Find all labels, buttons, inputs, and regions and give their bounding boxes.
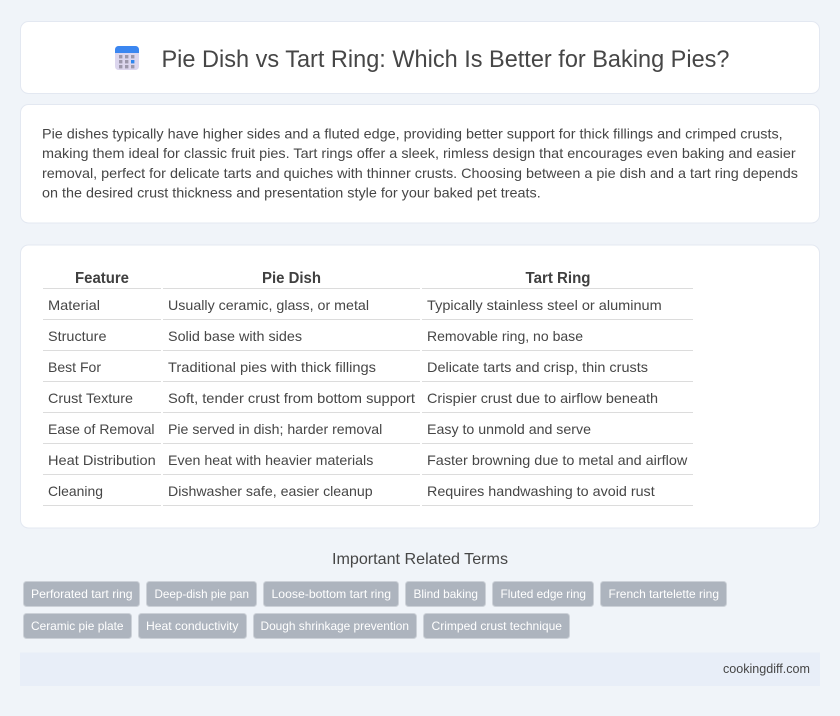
tag: deep-dish pie pan: Deep-dish pie pan xyxy=(154,587,249,601)
tag: heat conductivity xyxy=(138,614,246,638)
text block: introduction paragraph: on the desired crust thickness and presentation style for your baked pet treats. xyxy=(42,184,541,200)
tag: fluted edge ring: Fluted edge ring xyxy=(500,587,586,601)
table row: best for: Traditional pies with thick fillings xyxy=(168,359,376,375)
table row: cleaning: Requires handwashing to avoid rust xyxy=(427,483,655,499)
table header row xyxy=(75,270,590,287)
table row: material: Usually ceramic, glass, or metal xyxy=(168,297,369,313)
title: Pie Dish vs Tart Ring: Which Is Better for Baking Pies? xyxy=(162,46,730,73)
tag: dough shrinkage prevention xyxy=(254,614,416,638)
table row: material: Typically stainless steel or aluminum xyxy=(427,297,662,313)
icon: calendar xyxy=(115,46,139,70)
table row: best for xyxy=(48,359,648,375)
table row: heat distribution: Even heat with heavier materials xyxy=(168,452,373,468)
table row: best for: Delicate tarts and crisp, thin crusts xyxy=(427,359,648,375)
table row: structure: Removable ring, no base xyxy=(427,328,583,344)
table header row: Tart Ring xyxy=(526,270,590,287)
tag group: related terms xyxy=(24,582,726,638)
table row: crust texture xyxy=(48,390,658,406)
tag: ceramic pie plate xyxy=(24,614,132,638)
table row: material: Material xyxy=(48,297,100,313)
table row: best for: Best For xyxy=(48,359,101,375)
tag: dough shrinkage prevention: Dough shrinkage prevention xyxy=(260,619,409,633)
tag: perforated tart ring xyxy=(24,582,140,606)
table row: crust texture: Crispier crust due to airflow beneath xyxy=(427,390,658,406)
table row: ease of removal: Easy to unmold and serve xyxy=(427,421,591,437)
table row: heat distribution: Faster browning due to metal and airflow xyxy=(427,452,688,468)
tag: loose-bottom tart ring xyxy=(264,582,398,606)
table header row: Feature xyxy=(75,270,129,287)
heading: related terms: Important Related Terms xyxy=(332,551,508,568)
table header row: Pie Dish xyxy=(262,270,321,287)
tag: loose-bottom tart ring: Loose-bottom tart ring xyxy=(272,587,391,601)
table row: cleaning xyxy=(48,483,655,499)
tag: ceramic pie plate: Ceramic pie plate xyxy=(31,619,124,633)
panel: comparison table xyxy=(20,245,820,528)
table row: heat distribution: Heat Distribution xyxy=(48,452,156,468)
text block: introduction paragraph: making them ideal for classic fruit pies. Tart rings offer a sleek, rimless design that encourages even baking and easier xyxy=(42,145,796,161)
table row: structure: Structure xyxy=(48,328,107,344)
table row: structure: Solid base with sides xyxy=(168,328,302,344)
footer bar xyxy=(20,652,820,686)
text block: introduction paragraph: removal, perfect for delicate tarts and quiches with thinner crusts. Choosing between a pie dish and a tart ring depends xyxy=(42,165,798,181)
tag: perforated tart ring: Perforated tart ring xyxy=(31,587,132,601)
table row: ease of removal: Pie served in dish; harder removal xyxy=(168,421,382,437)
tag: fluted edge ring xyxy=(492,582,594,606)
tag: crimped crust technique: Crimped crust technique xyxy=(432,619,562,633)
panel: introduction xyxy=(20,104,820,223)
tag: blind baking: Blind baking xyxy=(414,587,478,601)
table row: material xyxy=(48,297,662,313)
table row: cleaning: Cleaning xyxy=(48,483,103,499)
table row: crust texture: Crust Texture xyxy=(48,390,133,406)
table row: ease of removal xyxy=(48,421,591,437)
table row: crust texture: Soft, tender crust from bottom support xyxy=(168,390,415,406)
table row: structure xyxy=(48,328,583,344)
tag: french tartelette ring: French tartelette ring xyxy=(608,587,719,601)
tag: blind baking xyxy=(406,582,486,606)
table row: cleaning: Dishwasher safe, easier cleanup xyxy=(168,483,373,499)
text block: introduction paragraph xyxy=(42,126,798,200)
tag: heat conductivity: Heat conductivity xyxy=(146,619,238,633)
tag: french tartelette ring xyxy=(600,582,726,606)
table row: ease of removal: Ease of Removal xyxy=(48,421,154,437)
tag: crimped crust technique xyxy=(424,614,570,638)
tag: deep-dish pie pan xyxy=(146,582,256,606)
footer source text: cookingdiff.com xyxy=(723,661,810,676)
panel: header xyxy=(20,22,820,94)
text block: introduction paragraph: Pie dishes typically have higher sides and a fluted edge, providing better support for thick fillings and crimped crusts, xyxy=(42,126,783,142)
table row: heat distribution xyxy=(48,452,688,468)
